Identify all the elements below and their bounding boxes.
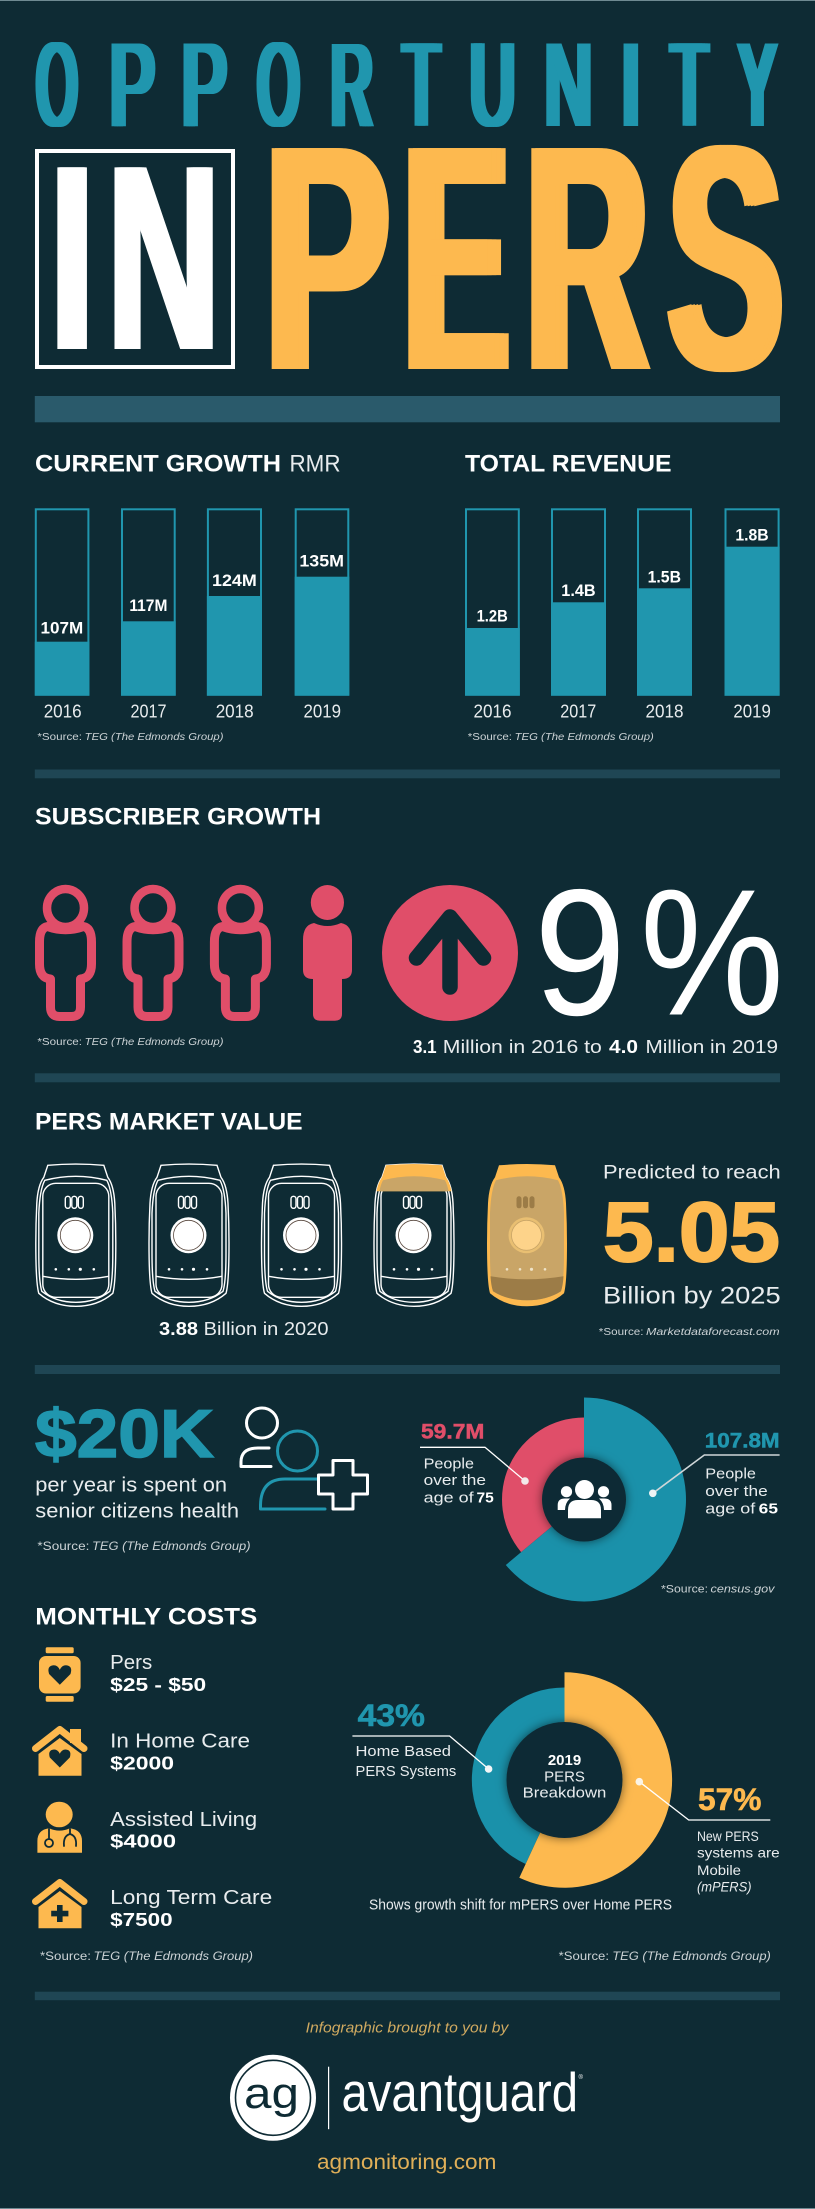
cost: assisted living (110, 1809, 257, 1851)
source: *Source: (468, 731, 512, 743)
panel: population donut (420, 1398, 780, 1602)
heading: monthly costs: MONTHLY COSTS (35, 1603, 257, 1630)
cost: in home care (110, 1730, 250, 1773)
donut center label: 2019 (548, 1752, 581, 1769)
text: over 65: 65 (759, 1501, 778, 1517)
label: 57%: 57% (698, 1781, 761, 1817)
title line: OPPORTUNITY: T (399, 18, 436, 152)
icon: watch (39, 1647, 81, 1702)
label: 59.7M: 59.7M (421, 1420, 484, 1443)
icon: device 5 filled (487, 1164, 567, 1306)
donut center label: PERS (544, 1769, 585, 1786)
bar chart: revenue: 2018 (646, 701, 684, 721)
title line: OPPORTUNITY: P (178, 18, 223, 152)
bar chart: RMR: 124M (212, 571, 257, 590)
text: over 75: People (424, 1456, 474, 1472)
panel: senior health spend (35, 1396, 368, 1553)
text: home based: Home Based (356, 1743, 451, 1760)
top edge (0, 0, 815, 1)
title word: PERS: P (259, 79, 385, 438)
title (32, 18, 782, 438)
cost: PERS: Pers (110, 1652, 152, 1674)
panel: PERS breakdown donut (352, 1672, 780, 1963)
bar chart: revenue (465, 509, 780, 721)
title line: OPPORTUNITY: I (618, 18, 635, 152)
text: over 65: over the (705, 1484, 768, 1500)
icon: device 2 (149, 1164, 229, 1306)
icon: house with heart (36, 1729, 84, 1776)
bar chart: RMR: 117M (129, 596, 167, 615)
caption: subscriber numbers: Million in 2016 to (443, 1037, 602, 1057)
leader line: 65 (649, 1455, 780, 1497)
title line: OPPORTUNITY: R (327, 18, 369, 152)
text: mobile: systems are (697, 1845, 780, 1861)
text: home based: PERS Systems (356, 1763, 456, 1780)
text: over 65: age of (705, 1501, 756, 1517)
panel: monthly costs (35, 1603, 272, 1963)
icon: outlined person 1 (40, 889, 92, 1016)
source: *Source: (599, 1326, 644, 1338)
title line: OPPORTUNITY: U (466, 18, 511, 152)
source: *Source: (40, 1951, 91, 1963)
leader line: mobile (636, 1778, 770, 1820)
cost: PERS (110, 1652, 206, 1695)
stat: 5.05: 5.05 (603, 1185, 780, 1279)
bar chart: revenue: 1.8B (735, 526, 769, 545)
icon: up arrow circle (382, 885, 518, 1021)
text: over 75: age of (424, 1490, 475, 1506)
text: predicted to reach: Predicted to reach (603, 1161, 781, 1183)
bar chart: revenue: 2017 (560, 701, 596, 721)
donut chart: population (502, 1398, 686, 1602)
source: TEG (The Edmonds Group) (94, 1951, 253, 1963)
bar chart: revenue: 1.4B (561, 581, 596, 600)
title box: IN (35, 149, 234, 369)
title line: OPPORTUNITY: P (106, 18, 151, 152)
caption: 3.88 billion: Billion in 2020 (204, 1319, 328, 1339)
text: over 65: People (705, 1466, 756, 1482)
label: 43%: 43% (358, 1697, 425, 1733)
bottom edge (0, 2208, 815, 2209)
text: health spending: senior citizens health (35, 1501, 239, 1523)
leader line: 75 (420, 1447, 529, 1485)
panel: total revenue (465, 451, 780, 743)
stat: $20K: $20K (35, 1396, 214, 1472)
source: TEG (The Edmonds Group) (85, 731, 224, 743)
source: TEG (The Edmonds Group) (515, 731, 654, 743)
stat: 9%: 9 (534, 852, 626, 1054)
divider (35, 396, 780, 422)
logo: avantguard wordmark: avantguard (342, 2061, 578, 2123)
cost: assisted living: $4000 (110, 1830, 176, 1851)
panel: subscriber growth (35, 803, 784, 1057)
caption: 3.88 billion: 3.88 (159, 1319, 198, 1339)
panel: footer (230, 2020, 584, 2174)
source: Marketdataforecast.com (646, 1326, 780, 1338)
source: TEG (The Edmonds Group) (612, 1951, 771, 1963)
text: mobile: New PERS (697, 1828, 759, 1844)
text: billion by 2025: Billion by 2025 (603, 1282, 781, 1309)
donut center label (523, 1752, 606, 1801)
bar chart: RMR: 135M (299, 552, 344, 571)
bar chart: revenue: 1.5B (648, 567, 681, 586)
icon: house with cross (36, 1882, 84, 1928)
text: over 75: over the (424, 1473, 486, 1489)
panel: current growth RMR (35, 451, 349, 743)
title box: IN: I (45, 110, 96, 405)
bar chart: RMR: 2018 (216, 701, 254, 721)
source: TEG (The Edmonds Group) (92, 1541, 251, 1553)
icon: device 3 (262, 1164, 342, 1306)
icon: device 4 partly filled (374, 1164, 454, 1306)
title line: OPPORTUNITY: O (32, 18, 73, 152)
cost: PERS: $25 - $50 (110, 1674, 206, 1695)
heading: PERS market value: PERS MARKET VALUE (35, 1108, 302, 1135)
heading: current growth: CURRENT GROWTH (35, 451, 281, 478)
leader line: home based (352, 1736, 492, 1773)
panel: PERS market value (35, 1108, 781, 1339)
heading: current growth: RMR (290, 451, 340, 478)
icon: people with plus (241, 1408, 368, 1509)
stat: 9%: % (640, 852, 784, 1054)
bar chart: RMR: 2017 (130, 701, 166, 721)
cost: in home care: In Home Care (110, 1730, 250, 1752)
logo: ag circle (230, 2055, 316, 2141)
title word: PERS: R (520, 79, 643, 438)
cost: long term care (110, 1887, 272, 1930)
bar chart: RMR: 107M (40, 618, 83, 637)
title line: OPPORTUNITY: O (254, 18, 295, 152)
heading: total revenue: TOTAL REVENUE (465, 451, 672, 478)
title word: PERS: S (662, 79, 779, 438)
icon: outlined person 3 (214, 889, 266, 1016)
icon: doctor (37, 1802, 82, 1853)
text: brought to you by: Infographic brought to you by (306, 2020, 509, 2036)
bar chart: revenue: 1.2B (477, 606, 508, 625)
cost: long term care: Long Term Care (110, 1887, 272, 1909)
logo: registered mark: ® (578, 2074, 584, 2081)
donut center label: Breakdown (523, 1784, 606, 1801)
bar chart: RMR (35, 509, 349, 721)
icon: outlined person 2 (127, 889, 179, 1016)
donut chart: PERS breakdown (472, 1672, 672, 1888)
text: over 75: 75 (476, 1490, 494, 1506)
text: mobile: Mobile (697, 1862, 741, 1878)
bar chart: RMR: 2019 (304, 701, 341, 721)
source: census.gov (710, 1584, 776, 1596)
source: *Source: (37, 731, 82, 743)
source: TEG (The Edmonds Group) (85, 1036, 224, 1048)
caption: growth shift: Shows growth shift for mPERS over Home PERS (369, 1897, 672, 1913)
text: mobile: (mPERS) (697, 1879, 752, 1895)
link: website: agmonitoring.com (317, 2151, 496, 2174)
title word: PERS: E (398, 79, 501, 438)
title word: PERS (259, 79, 782, 438)
title box: IN: N (104, 110, 217, 405)
cost: in home care: $2000 (110, 1752, 174, 1773)
icon: filled person (303, 885, 352, 1021)
cost: long term care: $7500 (110, 1909, 173, 1930)
icon: device 1 (36, 1164, 116, 1306)
icon: group of people (558, 1480, 612, 1518)
cost: assisted living: Assisted Living (110, 1809, 257, 1831)
title line: OPPORTUNITY (32, 18, 778, 152)
title line: OPPORTUNITY: N (541, 18, 588, 152)
source: *Source: (37, 1036, 82, 1048)
caption: subscriber numbers: 3.1 (413, 1037, 437, 1057)
source: *Source: (661, 1584, 708, 1596)
text: health spending: per year is spent on (35, 1475, 227, 1497)
caption: subscriber numbers: Million in 2019 (646, 1037, 778, 1057)
source: *Source: (559, 1951, 609, 1963)
heading: subscriber growth: SUBSCRIBER GROWTH (35, 803, 321, 830)
bar chart: revenue: 2016 (474, 701, 512, 721)
logo: ag circle: ag (244, 2069, 299, 2118)
title line: OPPORTUNITY: T (667, 18, 703, 152)
logo: divider (328, 2067, 329, 2129)
bar chart: revenue: 2019 (733, 701, 771, 721)
title line: OPPORTUNITY: Y (735, 18, 772, 152)
bar chart: RMR: 2016 (44, 701, 82, 721)
caption: subscriber numbers: 4.0 (609, 1037, 638, 1057)
label: 107.8M: 107.8M (705, 1430, 780, 1453)
source: *Source: (37, 1541, 89, 1553)
